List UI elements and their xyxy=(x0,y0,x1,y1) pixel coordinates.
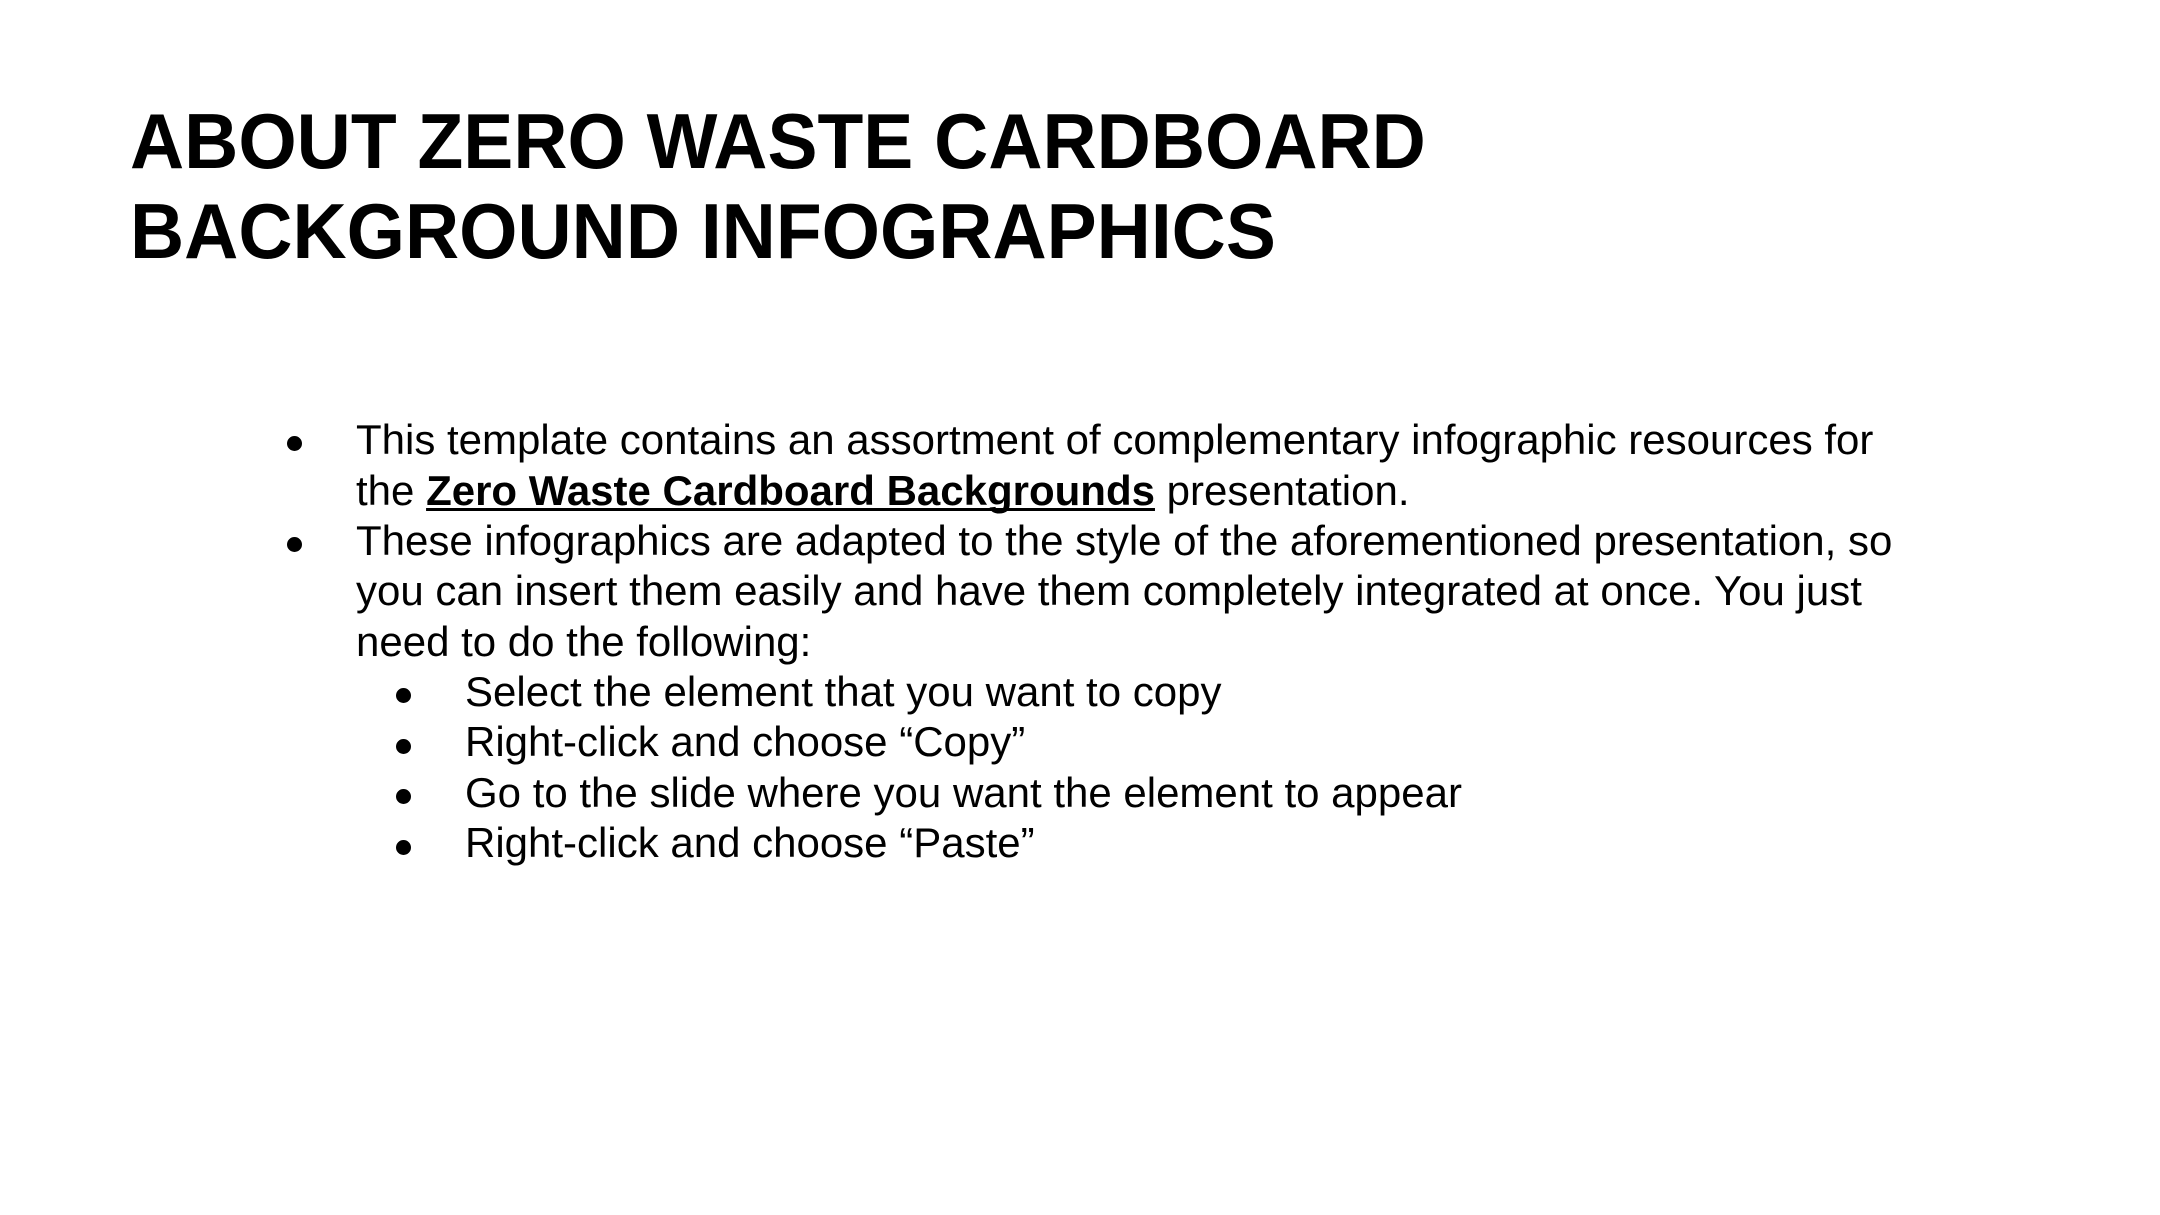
bullet 2 text line 1: These infographics are adapted to the style of the aforementioned presentation, so xyxy=(356,517,1892,564)
sub-bullet 2 marker xyxy=(396,739,411,754)
bullet 2 marker xyxy=(287,537,302,552)
bullet 2 text line 2: you can insert them easily and have them completely integrated at once. You just xyxy=(356,567,1862,614)
title: ABOUT ZERO WASTE CARDBOARD xyxy=(130,97,1426,185)
sub-bullet 1 marker xyxy=(396,688,411,703)
title: BACKGROUND INFOGRAPHICS xyxy=(130,187,1276,275)
sub-bullet 3 marker xyxy=(396,789,411,804)
sub-bullet 2 text: Right-click and choose “Copy” xyxy=(465,718,1025,765)
bullet 1 text line 2: the Zero Waste Cardboard Backgrounds presentation. xyxy=(356,467,1410,514)
sub-bullet 3 text: Go to the slide where you want the element to appear xyxy=(465,769,1462,816)
sub-bullet 1 text: Select the element that you want to copy xyxy=(465,668,1221,715)
bullet 2 text line 3: need to do the following: xyxy=(356,618,811,665)
bullet 1 marker xyxy=(287,436,302,451)
sub-bullet 4 text: Right-click and choose “Paste” xyxy=(465,819,1035,866)
bullet 1 text line 1: This template contains an assortment of complementary infographic resources for xyxy=(356,416,1873,463)
sub-bullet 4 marker xyxy=(396,840,411,855)
title xyxy=(130,97,1426,275)
